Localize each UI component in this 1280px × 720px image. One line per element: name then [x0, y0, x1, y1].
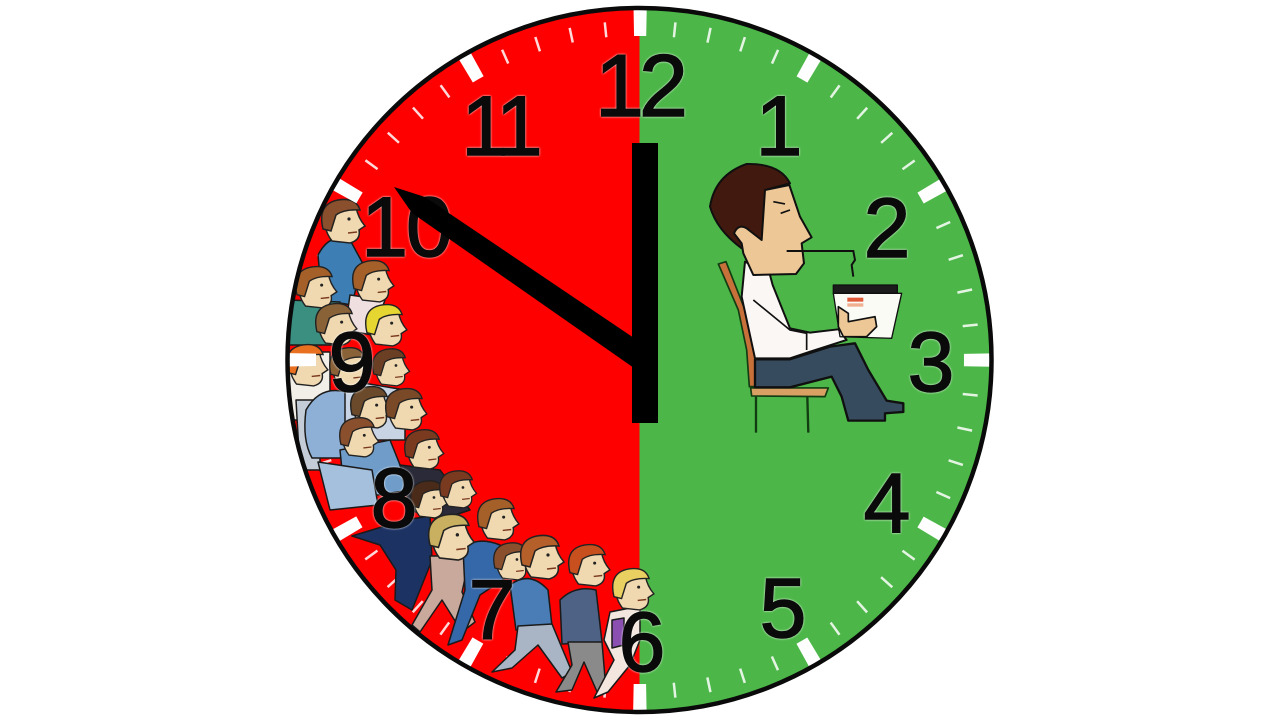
shirt and neck	[742, 262, 847, 358]
trousers	[755, 343, 903, 421]
hour numerals: 9	[329, 315, 375, 409]
chair	[718, 262, 828, 433]
hour hand	[394, 187, 634, 368]
hour numerals: 3	[908, 315, 954, 409]
hour numerals: 12	[595, 36, 684, 135]
hair	[710, 164, 790, 248]
crowd of people walking from 10 to 6	[287, 199, 654, 698]
noodle strand	[787, 251, 855, 277]
crowd heads	[287, 199, 654, 610]
hour numerals: 6	[619, 595, 665, 689]
clock rim	[288, 8, 992, 712]
hour numerals: 2	[864, 181, 910, 275]
eye and brow	[773, 202, 790, 213]
hour numerals: 11	[461, 79, 539, 173]
hour numerals: 8	[371, 451, 417, 545]
red half of the dial	[288, 8, 640, 712]
hour numerals: 5	[760, 561, 806, 655]
face	[734, 185, 812, 275]
hour numerals: 1	[756, 79, 802, 173]
crowd body shapes	[288, 238, 640, 698]
man sitting on chair eating noodles	[710, 164, 903, 433]
white hour tick marks	[302, 22, 978, 698]
arm outline and belt	[753, 300, 807, 359]
hour numerals: 10	[361, 180, 451, 274]
hour numerals	[329, 36, 954, 689]
clock face	[288, 8, 992, 712]
minute tick marks	[308, 28, 972, 692]
minute hand	[632, 143, 658, 423]
noodle cup	[833, 285, 902, 338]
hand holding cup	[838, 307, 877, 337]
hour numerals: 7	[469, 563, 515, 657]
green half of the dial	[640, 8, 992, 712]
hour numerals: 4	[864, 456, 910, 550]
